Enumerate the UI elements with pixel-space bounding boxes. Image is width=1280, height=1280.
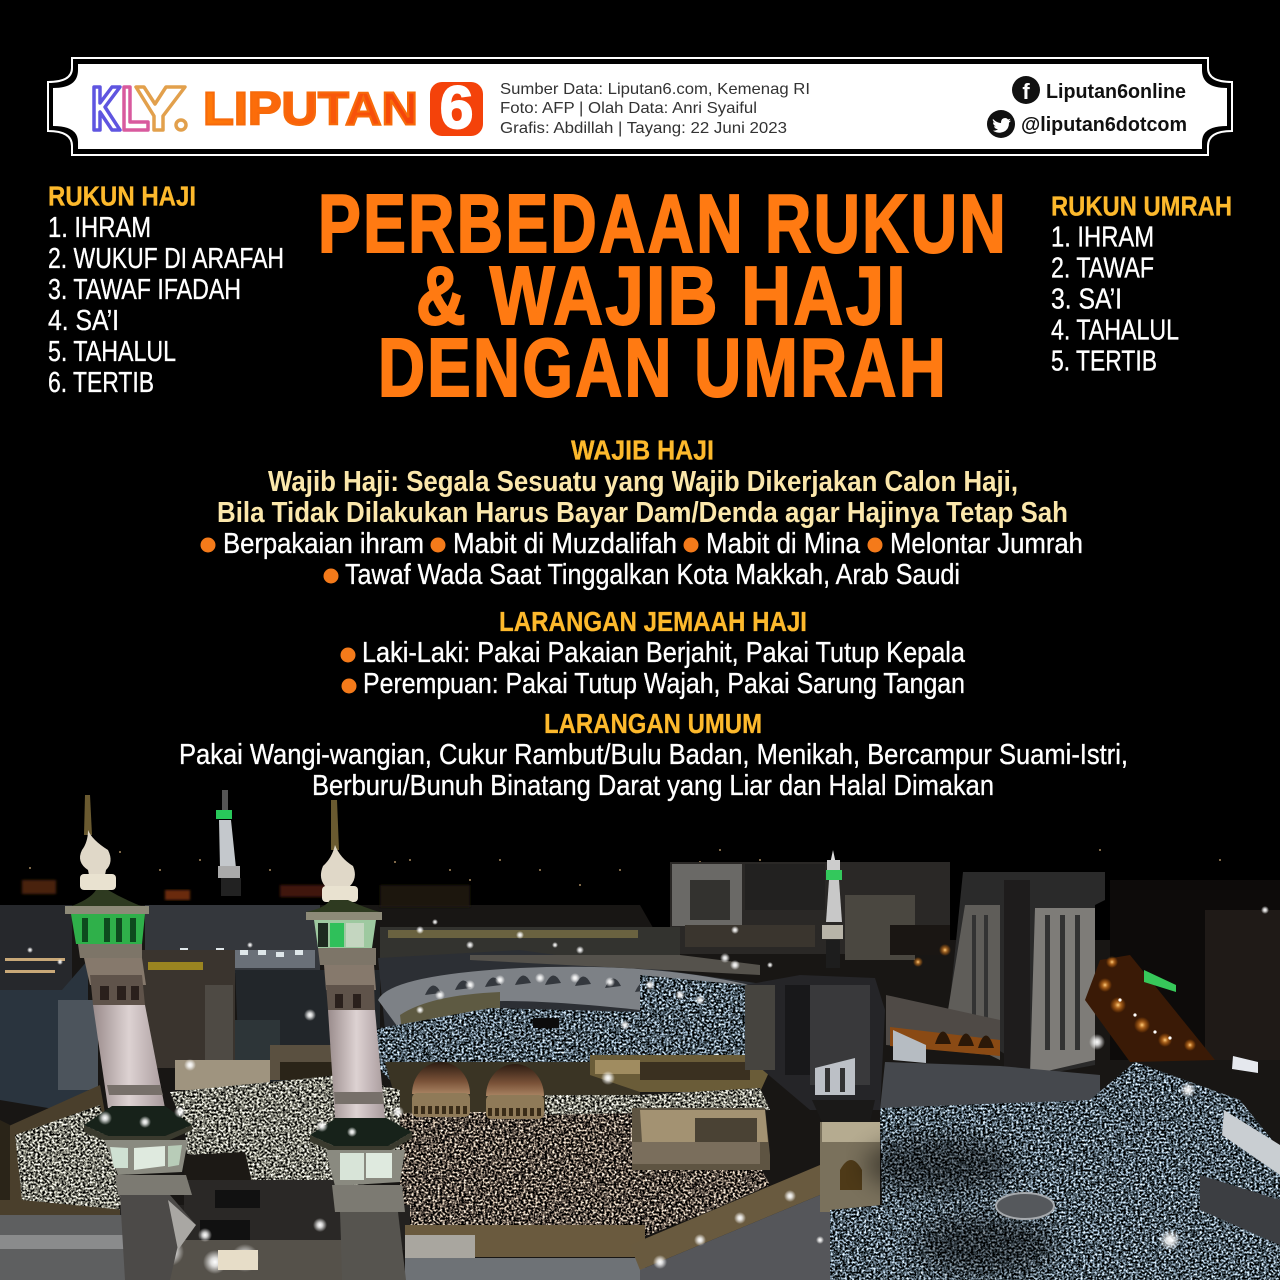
dark crowd patch	[184, 1152, 252, 1182]
bullet list: Laki-Laki: Pakai Pakaian Berjahit, Pakai Tutup Kepala	[362, 637, 966, 669]
icon: facebook: f	[1022, 79, 1030, 104]
brown block building	[140, 950, 235, 1068]
fountain ring	[996, 1193, 1054, 1219]
lower crowd, warm right	[625, 1170, 770, 1238]
right hand towers	[948, 872, 1105, 1075]
minaret centre	[306, 800, 412, 1280]
list	[48, 212, 284, 399]
mid grey roofs	[175, 970, 380, 1090]
body text: Pakai Wangi-wangian, Cukur Rambut/Bulu Badan, Menikah, Bercampur Suami-Istri,	[179, 739, 1128, 771]
pale sign building	[1222, 1110, 1280, 1175]
source credits: Sumber Data: Liputan6.com, Kemenag RI	[500, 81, 810, 98]
title: DENGAN UMRAH	[378, 321, 948, 414]
Liputan 6 badge	[430, 74, 483, 141]
list	[1051, 222, 1179, 378]
list: 3. TAWAF IFADAH	[48, 274, 241, 306]
list: 4. TAHALUL	[1051, 314, 1179, 346]
far minaret, back left	[216, 790, 241, 896]
white screen	[1232, 1056, 1258, 1073]
plaza dark crowd patches	[865, 1137, 1055, 1275]
frame outline	[48, 58, 1232, 155]
icon: facebook	[1012, 76, 1040, 104]
facebook handle: Liputan6online	[1046, 81, 1186, 103]
bullet list: Mabit di Muzdalifah	[453, 528, 677, 560]
minaret left	[65, 795, 196, 1280]
scene base	[0, 905, 1280, 1280]
bullet list	[340, 637, 966, 700]
heading: LARANGAN UMUM	[544, 708, 762, 739]
city lights in the distant sky	[22, 849, 1221, 907]
list: 2. WUKUF DI ARAFAH	[48, 243, 284, 275]
list: 5. TERTIB	[1051, 346, 1157, 378]
list: 6. TERTIB	[48, 367, 154, 399]
body text	[179, 739, 1128, 802]
list: 1. IHRAM	[48, 212, 151, 244]
frame fill	[53, 64, 1227, 149]
panel: rukun umrah	[1051, 190, 1232, 378]
heading: WAJIB HAJI	[571, 434, 714, 466]
right dark block tower	[745, 975, 885, 1110]
panel: larangan umum	[179, 708, 1128, 802]
panel: larangan jemaah haji	[340, 606, 966, 700]
arcade, orange lit	[886, 995, 1000, 1056]
bullet list	[200, 528, 1083, 591]
tan corner tower	[812, 1100, 880, 1212]
Liputan 6 badge: 6	[440, 74, 473, 141]
list: 1. IHRAM	[1051, 222, 1154, 254]
bullet list: Berpakaian ihram	[223, 528, 424, 560]
street with traffic	[1085, 955, 1215, 1062]
definition: Bila Tidak Dilakukan Harus Bayar Dam/Denda agar Hajinya Tetap Sah	[217, 497, 1068, 529]
flood lights	[27, 906, 1269, 1251]
domes	[412, 1062, 544, 1119]
tan terrace band	[385, 1055, 770, 1115]
green sign	[1144, 970, 1176, 992]
far building, dark right	[1110, 880, 1280, 1060]
list: 3. SA’I	[1051, 284, 1122, 316]
crowd between minarets	[170, 1075, 400, 1195]
roof terrace tan	[632, 1108, 770, 1170]
Kaaba	[533, 1018, 559, 1028]
title: & WAJIB HAJI	[416, 249, 908, 342]
twitter handle: @liputan6dotcom	[1021, 114, 1187, 136]
panel: wajib haji	[200, 434, 1083, 591]
definition: Wajib Haji: Segala Sesuatu yang Wajib Dikerjakan Calon Haji,	[268, 466, 1018, 498]
left background buildings	[0, 905, 320, 1110]
title: PERBEDAAN RUKUN	[318, 177, 1008, 270]
far buildings, right	[670, 862, 951, 967]
heading: RUKUN HAJI	[48, 180, 196, 212]
upper crowd around the Kaaba	[370, 1008, 770, 1090]
upper-right crowd	[640, 975, 745, 1052]
bullet list: Mabit di Mina	[706, 528, 861, 560]
bullet list: Tawaf Wada Saat Tinggalkan Kota Makkah, Arab Saudi	[345, 559, 960, 591]
Liputan wordmark: LIPUTAN	[203, 82, 418, 134]
list: 4. SA’I	[48, 305, 119, 337]
heading: LARANGAN JEMAAH HAJI	[499, 606, 807, 637]
heading: RUKUN UMRAH	[1051, 190, 1232, 222]
source credits	[500, 81, 810, 137]
upper band behind the courtyard	[380, 927, 680, 961]
main crowd, warm	[400, 1110, 640, 1228]
far minaret, right	[822, 850, 843, 968]
icon: twitter	[987, 110, 1015, 138]
bullet list: Melontar Jumrah	[890, 528, 1083, 560]
body text: Berburu/Bunuh Binatang Darat yang Liar dan Halal Dimakan	[312, 770, 994, 802]
plaza crowd, blue-white	[830, 1062, 1280, 1280]
source credits: Foto: AFP | Olah Data: Anri Syaiful	[500, 100, 757, 117]
dark central roof	[120, 1180, 410, 1250]
crowd right of roof	[545, 1088, 770, 1115]
panel: rukun haji	[48, 180, 284, 399]
concrete plaza	[880, 1030, 1100, 1112]
header band	[48, 58, 1232, 155]
right low buildings	[1200, 1175, 1280, 1245]
photo: Masjidil Haram at night	[0, 790, 1280, 1280]
source credits: Grafis: Abdillah | Tayang: 22 Juni 2023	[500, 120, 787, 137]
title	[318, 177, 1008, 414]
left terrace	[0, 1085, 125, 1225]
bottom facade	[0, 1165, 832, 1280]
definition	[217, 466, 1068, 529]
KLY logo	[94, 87, 186, 130]
list: 2. TAWAF	[1051, 252, 1154, 284]
bullet list: Perempuan: Pakai Tutup Wajah, Pakai Sarung Tangan	[363, 668, 965, 700]
upper courtyard ring	[378, 950, 770, 1032]
list: 5. TAHALUL	[48, 336, 176, 368]
